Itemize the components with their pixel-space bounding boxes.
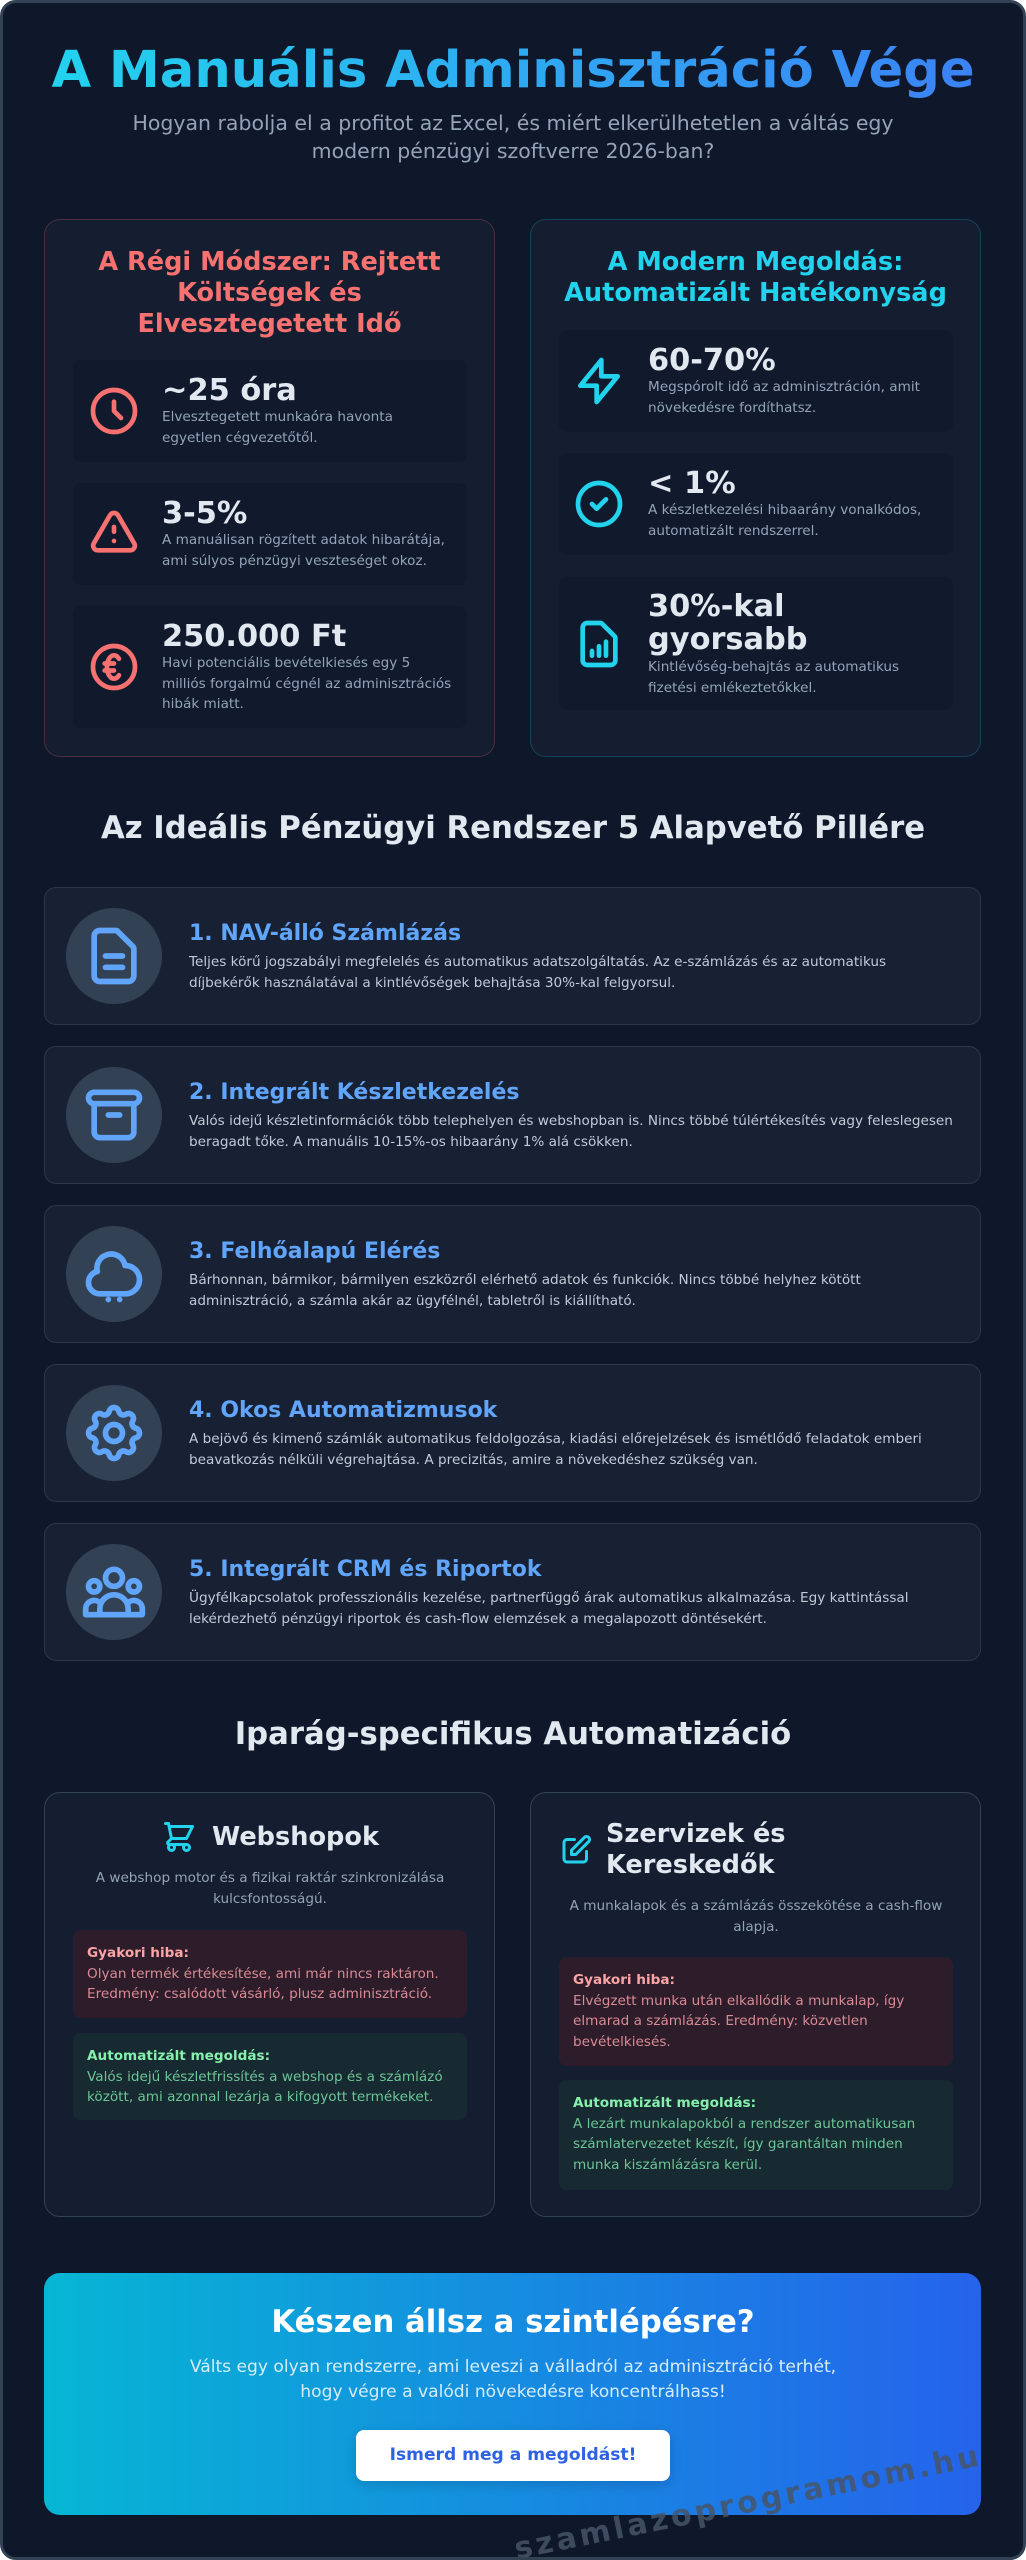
value: time saved: 60-70% bbox=[648, 343, 776, 378]
description: webshops bbox=[96, 1870, 444, 1907]
pillar description: Valós idejű készletinformációk több telephelyen és webshopban is. Nincs többé túlértékesítés vagy feleslegesen bbox=[189, 1113, 953, 1129]
CTA text: Válts egy olyan rendszerre, ami leveszi a válladról az adminisztráció terhét, bbox=[190, 2357, 836, 2377]
heading: services: Kereskedők bbox=[606, 1850, 775, 1880]
heading: modern solution: A Modern Megoldás: bbox=[608, 247, 903, 277]
heading: services: Szervizek és bbox=[606, 1819, 786, 1849]
description: 25 hours: Elvesztegetett munkaóra havonta bbox=[162, 409, 393, 425]
pillar title: 3. Felhőalapú Elérés bbox=[189, 1239, 440, 1264]
pillar description: beavatkozás nélküli végrehajtása. A precizitás, amire a növekedéshez szükség van. bbox=[189, 1452, 758, 1468]
pillar 5 bbox=[44, 1523, 981, 1661]
icon: user group bbox=[66, 1544, 162, 1640]
subtitle: Hogyan rabolja el a profitot az Excel, és miért elkerülhetetlen a váltás egy bbox=[132, 111, 894, 135]
pillar title: 4. Okos Automatizmusok bbox=[189, 1398, 497, 1423]
pillar description: Bárhonnan, bármikor, bármilyen eszközről elérhető adatok és funkciók. Nincs többé helyhez kötött bbox=[189, 1272, 861, 1288]
heading: old method: Költségek és bbox=[177, 278, 362, 308]
description: faster collection: Kintlévőség-behajtás az automatikus bbox=[648, 659, 899, 675]
value: faster collection: gyorsabb bbox=[648, 622, 808, 657]
icon: document report bbox=[580, 620, 618, 668]
description: lost revenue: milliós forgalmú cégnél az adminisztrációs bbox=[162, 676, 451, 692]
panel: services bbox=[530, 1792, 981, 2217]
callout: automated solution, services: számlatervezetet készít, így garantáltan minden bbox=[573, 2136, 903, 2152]
icon: euro bbox=[90, 644, 138, 690]
pillar description: A bejövő és kimenő számlák automatikus feldolgozása, kiadási előrejelzések és ismétlődő feladatok emberi bbox=[189, 1431, 922, 1447]
pillar description: lekérdezhető pénzügyi riportok és cash-flow elemzések a megalapozott döntésekért. bbox=[189, 1611, 767, 1627]
icon: document bbox=[66, 908, 162, 1004]
pillar description bbox=[189, 1431, 922, 1468]
callout: automated solution, services bbox=[559, 2080, 953, 2190]
description: services bbox=[570, 1898, 942, 1935]
description: time saved: növekedésre fordíthatsz. bbox=[648, 400, 816, 416]
pillar description: Ügyfélkapcsolatok professzionális kezelése, partnerfüggő árak automatikus alkalmazása. Egy kattintással bbox=[189, 1590, 909, 1606]
callout: automated solution, webshops: Valós idejű készletfrissítés a webshop és a számlázó bbox=[87, 2069, 443, 2085]
callout: common mistake, services: elmarad a számlázás. Eredmény: közvetlen bbox=[573, 2013, 868, 2029]
description: error rate: A manuálisan rögzített adatok hibarátája, bbox=[162, 532, 445, 548]
stat: time saved bbox=[559, 330, 953, 432]
heading: webshops: Webshopok bbox=[212, 1822, 379, 1852]
description: services: A munkalapok és a számlázás összekötése a cash-flow bbox=[570, 1898, 942, 1914]
icon: lightning bbox=[578, 358, 620, 404]
callout: automated solution, services: Automatizált megoldás: bbox=[573, 2095, 756, 2111]
heading: modern solution bbox=[564, 247, 947, 308]
pillar description: díjbekérők használatával a kintlévőségek behajtása 30%-kal felgyorsul. bbox=[189, 975, 675, 991]
callout: automated solution, webshops: Automatizált megoldás: bbox=[87, 2048, 270, 2064]
icon: gear bbox=[66, 1385, 162, 1481]
description: 25 hours: egyetlen cégvezetőtől. bbox=[162, 430, 318, 446]
pillar 4 bbox=[44, 1364, 981, 1502]
heading: old method: A Régi Módszer: Rejtett bbox=[98, 247, 441, 277]
subtitle bbox=[132, 111, 894, 163]
pillar description bbox=[189, 1113, 953, 1150]
callout: automated solution, services: A lezárt munkalapokból a rendszer automatikusan bbox=[573, 2116, 915, 2132]
callout: automated solution, webshops: között, ami azonnal lezárja a kifogyott termékeket. bbox=[87, 2089, 433, 2105]
icon: cloud bbox=[66, 1226, 162, 1322]
stat: error rate bbox=[73, 483, 467, 585]
callout: common mistake, services bbox=[559, 1957, 953, 2066]
pillar title: 1. NAV-álló Számlázás bbox=[189, 921, 461, 946]
value: inventory error: < 1% bbox=[648, 466, 736, 501]
description: time saved bbox=[648, 379, 920, 416]
heading: modern solution: Automatizált Hatékonyság bbox=[564, 278, 947, 308]
title: A Manuális Adminisztráció Vége bbox=[51, 40, 975, 100]
pillar 1 bbox=[44, 887, 981, 1025]
icon: archive box bbox=[66, 1067, 162, 1163]
description: error rate bbox=[162, 532, 445, 569]
description: faster collection bbox=[648, 659, 899, 696]
callout: common mistake, webshops: Eredmény: csalódott vásárló, plusz adminisztráció. bbox=[87, 1986, 432, 2002]
description: time saved: Megspórolt idő az adminisztráción, amit bbox=[648, 379, 920, 395]
callout: automated solution, webshops bbox=[73, 2033, 467, 2120]
value: error rate: 3-5% bbox=[162, 496, 247, 531]
CTA button: Ismerd meg a megoldást! bbox=[390, 2445, 636, 2465]
description: inventory error: A készletkezelési hibaarány vonalkódos, bbox=[648, 502, 921, 518]
call to action panel bbox=[44, 2273, 981, 2515]
description: lost revenue bbox=[162, 655, 451, 712]
callout: common mistake, services: Elvégzett munka után elkallódik a munkalap, így bbox=[573, 1993, 904, 2009]
icon: clock bbox=[90, 388, 138, 434]
stat: lost revenue bbox=[73, 606, 467, 728]
pillar description: adminisztráció, a számla akár az ügyfélnél, tabletről is kiállítható. bbox=[189, 1293, 636, 1309]
pillar description bbox=[188, 954, 886, 991]
callout: automated solution, services: munka kiszámlázásra kerül. bbox=[573, 2157, 762, 2173]
panel: webshops bbox=[44, 1792, 495, 2217]
panel: old method bbox=[44, 219, 495, 757]
description: webshops: kulcsfontosságú. bbox=[213, 1891, 327, 1907]
pillar title: 5. Integrált CRM és Riportok bbox=[189, 1557, 542, 1582]
callout: common mistake, webshops: Olyan termék értékesítése, ami már nincs raktáron. bbox=[87, 1966, 439, 1982]
stat: 25 hours bbox=[73, 360, 467, 462]
CTA heading: Készen állsz a szintlépésre? bbox=[271, 2304, 755, 2340]
subtitle: modern pénzügyi szoftverre 2026-ban? bbox=[312, 139, 714, 163]
pillar 3 bbox=[44, 1205, 981, 1343]
description: lost revenue: hibák miatt. bbox=[162, 696, 244, 712]
description: lost revenue: Havi potenciális bevételkiesés egy 5 bbox=[162, 655, 410, 671]
pillar 2 bbox=[44, 1046, 981, 1184]
callout: common mistake, services: Gyakori hiba: bbox=[573, 1972, 675, 1988]
description: services: alapja. bbox=[733, 1919, 779, 1935]
description: faster collection: fizetési emlékeztetőkkel. bbox=[648, 680, 817, 696]
stat: inventory error bbox=[559, 453, 953, 555]
CTA text: hogy végre a valódi növekedésre koncentrálhass! bbox=[300, 2382, 726, 2402]
description: webshops: A webshop motor és a fizikai raktár szinkronizálása bbox=[96, 1870, 444, 1886]
value: faster collection: 30%-kal bbox=[648, 589, 784, 624]
pillar description: beragadt tőke. A manuális 10-15%-os hibaarány 1% alá csökken. bbox=[189, 1134, 633, 1150]
value: lost revenue: 250.000 Ft bbox=[162, 619, 346, 654]
description: inventory error bbox=[648, 502, 921, 539]
section heading: pillars: Az Ideális Pénzügyi Rendszer 5 Alapvető Pillére bbox=[101, 810, 925, 846]
callout: common mistake, webshops bbox=[73, 1930, 467, 2018]
heading: services bbox=[606, 1819, 786, 1880]
heading: old method bbox=[98, 247, 441, 339]
icon: cart bbox=[164, 1822, 194, 1852]
pillar title: 2. Integrált Készletkezelés bbox=[189, 1080, 519, 1105]
description: 25 hours bbox=[162, 409, 393, 446]
section heading: industry: Iparág-specifikus Automatizáció bbox=[235, 1716, 791, 1752]
pillar description bbox=[189, 1590, 909, 1627]
callout: common mistake, webshops: Gyakori hiba: bbox=[87, 1945, 189, 1961]
CTA text bbox=[190, 2357, 836, 2402]
pillar description bbox=[189, 1272, 861, 1309]
callout: common mistake, services: bevételkiesés. bbox=[573, 2034, 671, 2050]
value: faster collection bbox=[648, 589, 808, 657]
icon: check circle bbox=[576, 480, 622, 528]
heading: old method: Elvesztegetett Idő bbox=[137, 309, 402, 339]
icon: pencil bbox=[562, 1835, 591, 1864]
icon: warning bbox=[90, 510, 138, 553]
description: inventory error: automatizált rendszerrel. bbox=[648, 523, 819, 539]
panel: modern solution bbox=[530, 219, 981, 757]
CTA button bbox=[356, 2430, 670, 2481]
pillar description: Teljes körű jogszabályi megfelelés és automatikus adatszolgáltatás. Az e-számlázás és az automatikus bbox=[189, 954, 886, 970]
stat: faster collection bbox=[559, 577, 953, 710]
value: 25 hours: ~25 óra bbox=[162, 373, 297, 408]
description: error rate: ami súlyos pénzügyi veszteséget okoz. bbox=[162, 553, 427, 569]
